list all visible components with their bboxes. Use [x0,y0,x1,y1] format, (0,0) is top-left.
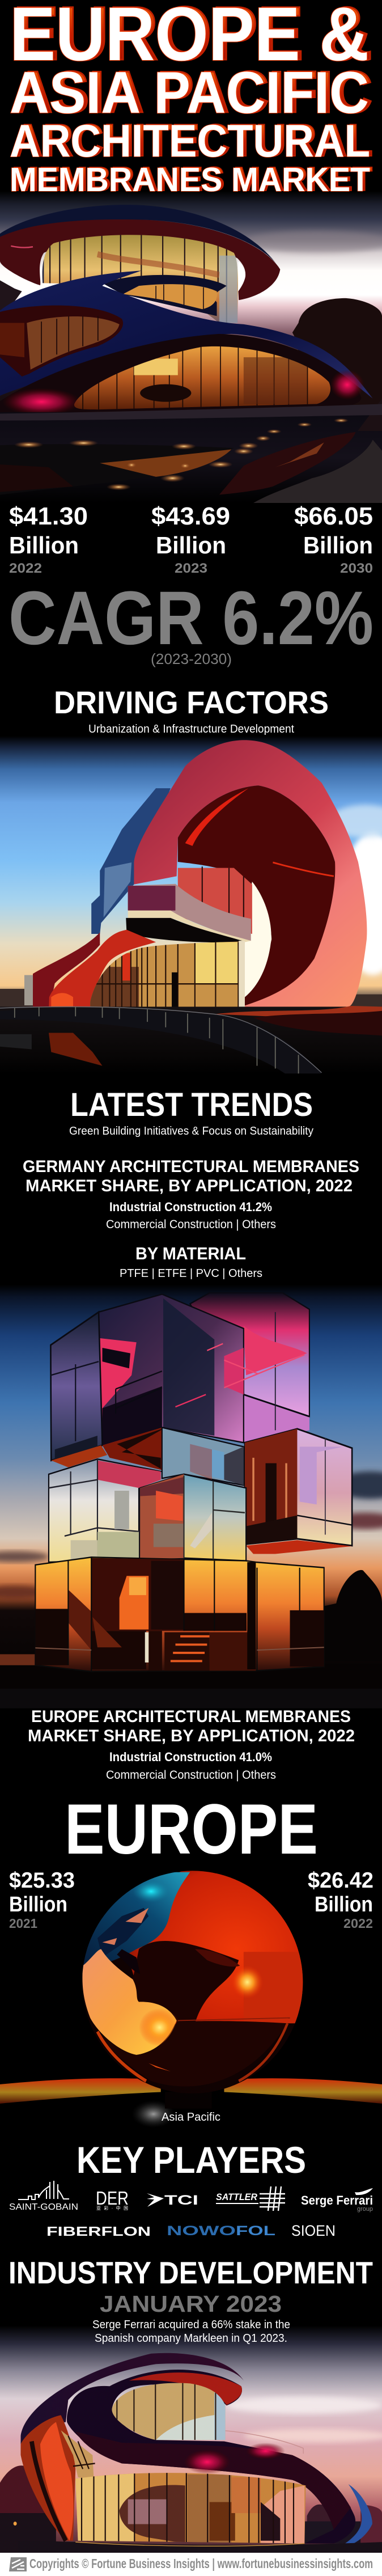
development text: Serge Ferrari acquired a 66% stake in the [92,2319,290,2331]
development text: Spanish company Markleen in Q1 2023. [95,2332,287,2345]
stat: 2030: $66.05 [294,502,373,530]
image: stacked glass cubes [0,1284,382,1708]
market size stats [9,502,373,576]
Germany market share block: MARKET SHARE, BY APPLICATION, 2022 [26,1177,353,1195]
stat: 2022: $41.30 [9,502,88,530]
logos: key players [9,2181,373,2239]
title [10,0,373,198]
heading: driving factors: DRIVING FACTORS [54,684,329,720]
logo: Nowofol [167,2223,275,2239]
Germany market share block: Commercial Construction | Others [106,1218,276,1231]
stat: 2030 [294,502,373,576]
by material block: PTFE | ETFE | PVC | Others [120,1267,262,1280]
image: S-shaped building [0,2325,382,2554]
Europe market share block: Industrial Construction 41.0% [109,1750,272,1764]
stat: Europe 2021: $25.33 [9,1868,75,1893]
logo: Nowofol: NOWO [167,2223,236,2239]
development date: JANUARY 2023 [100,2291,282,2317]
logo: Sattler: SATTLER [216,2192,258,2202]
by material block [120,1243,262,1280]
logo: TCI: TCI [164,2193,198,2208]
Europe market share block: EUROPE ARCHITECTURAL MEMBRANES [31,1707,351,1726]
stat: 2030: 2030 [340,561,373,576]
logo: Saint-Gobain [9,2181,78,2212]
Germany market share block: Industrial Construction 41.2% [109,1200,272,1214]
Germany market share block: GERMANY ARCHITECTURAL MEMBRANES [23,1157,359,1176]
stat: Europe 2022 [308,1868,373,1931]
label: Asia Pacific: Asia Pacific [162,2111,220,2124]
stat: Europe 2022: 2022 [343,1916,373,1931]
title line: Membranes Market: MEMBRANES MARKET [10,161,370,198]
heading: Europe: EUROPE [65,1790,318,1869]
logo: Serge Ferrari [301,2188,373,2213]
icon: Fortune Business Insights logo [9,2557,27,2571]
image: red ribbon building [0,736,382,1074]
heading: key players: KEY PLAYERS [77,2139,306,2181]
stat: 2023: $43.69 [151,502,230,530]
by material block: BY MATERIAL [135,1243,246,1263]
stat: 2022: 2022 [9,561,42,576]
stat: Europe 2021 [9,1868,75,1931]
stat: 2022 [9,502,88,576]
logo: Nowofol: FOL [236,2223,275,2239]
logo: Serge Ferrari: group [357,2206,373,2213]
logo: DER: DER [96,2188,129,2209]
logo: TCI [147,2193,198,2208]
heading: latest trends: LATEST TRENDS [70,1086,313,1123]
stat: Europe 2022: $26.42 [308,1868,373,1893]
logo: Saint-Gobain: SAINT-GOBAIN [9,2202,78,2212]
stat: 2022: Billion [9,532,79,559]
Europe market share block [28,1707,355,1782]
logo: Sattler [216,2186,285,2211]
stat: Europe 2022: Billion [315,1893,373,1917]
Germany market share block [23,1157,359,1231]
Europe market share block: Commercial Construction | Others [106,1769,276,1782]
development text [92,2319,290,2345]
CAGR period: (2023-2030) [151,650,232,667]
Europe market share block: MARKET SHARE, BY APPLICATION, 2022 [28,1727,355,1745]
title line: Membranes Market: MEMBRANES MARKET [12,160,372,198]
image: globe [0,1861,382,2127]
logo: DER: 亚彩·中国 [96,2205,128,2211]
stat: 2023: Billion [156,532,226,559]
stat: 2023 [151,502,230,576]
footer [0,2553,382,2576]
stat: 2030: Billion [303,532,373,559]
driving factors text: Urbanization & Infrastructure Development [88,723,294,735]
stat: Europe 2021: 2021 [9,1916,37,1931]
latest trends text: Green Building Initiatives & Focus on Sustainability [69,1125,313,1137]
hero image: curved building at dusk [0,191,382,503]
logo: Serge Ferrari: Serge Ferrari [301,2193,373,2207]
logo: Sioen: SIOEN [291,2222,336,2239]
logo: Fiberflon: FIBERFLON [46,2224,151,2239]
stat: 2023: 2023 [175,561,207,576]
stat: Europe 2021: Billion [9,1893,67,1917]
